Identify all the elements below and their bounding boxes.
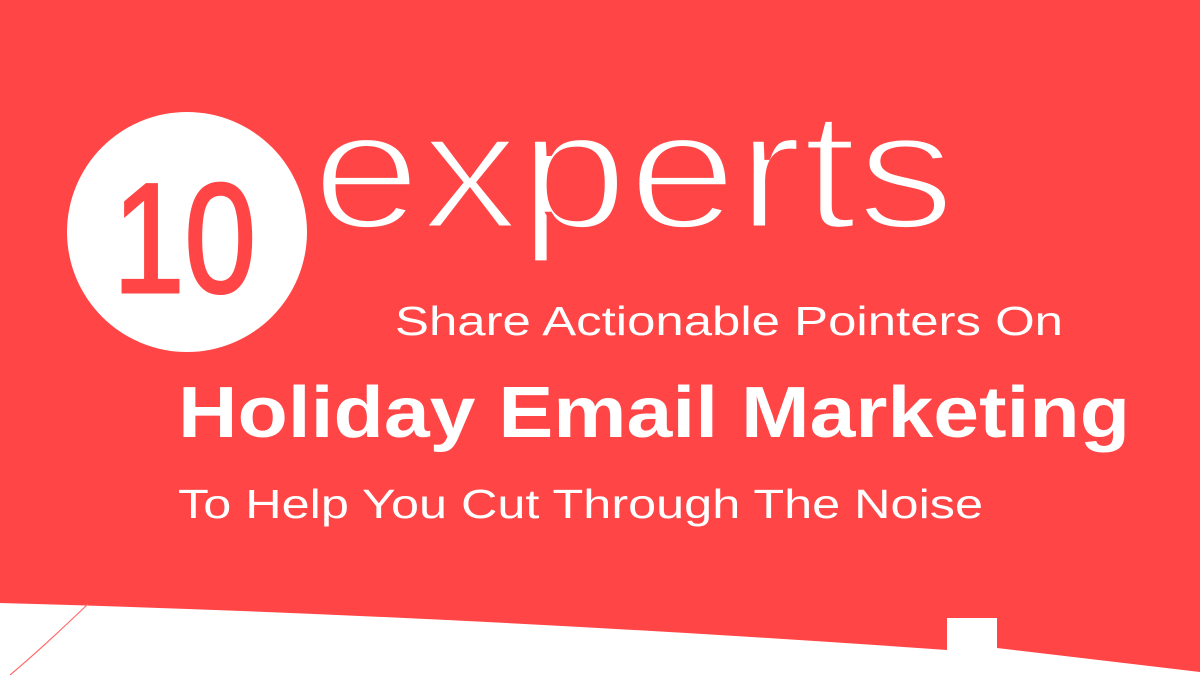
- subtitle line 2: To Help You Cut Through The Noise: [178, 481, 983, 527]
- main title: Holiday Email Marketing: [178, 373, 1130, 453]
- circle badge with 10: 10: [113, 152, 256, 326]
- word experts: experts: [312, 76, 955, 264]
- decorative thin line: [10, 604, 88, 675]
- circle badge with 10: [67, 112, 307, 352]
- subtitle line 1: Share Actionable Pointers On: [395, 298, 1063, 344]
